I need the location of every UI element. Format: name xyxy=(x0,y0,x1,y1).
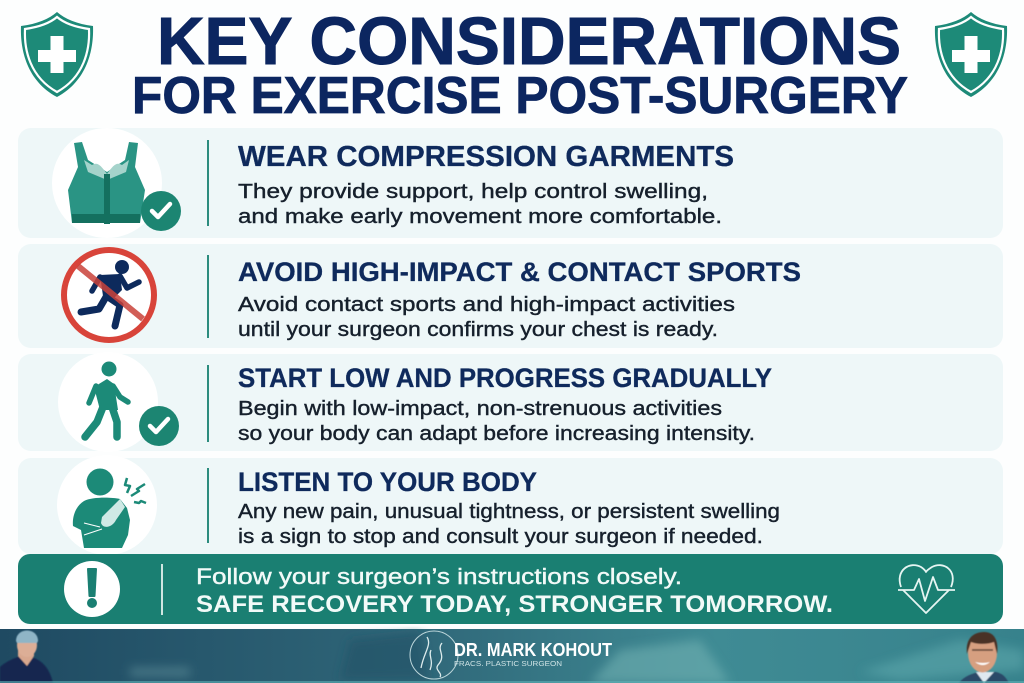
body: garments: and make early movement more comfortable. xyxy=(238,205,722,228)
icon: compression garment xyxy=(52,128,181,238)
surgeon photo left xyxy=(0,630,53,683)
body: sports xyxy=(238,293,735,341)
banner text xyxy=(196,564,833,618)
body: garments: They provide support, help control swelling, xyxy=(238,180,708,203)
icon: walking person xyxy=(58,352,179,452)
title: KEY CONSIDERATIONS xyxy=(157,4,901,79)
icon: heart with pulse xyxy=(898,565,955,613)
surgeon photo right xyxy=(959,632,1009,683)
footer name: DR. MARK KOHOUT xyxy=(454,640,612,660)
callout banner xyxy=(18,554,1003,624)
heading: listen: LISTEN TO YOUR BODY xyxy=(238,467,537,497)
body: progress: so your body can adapt before increasing intensity. xyxy=(238,422,755,445)
logo xyxy=(410,631,458,679)
icon: person with chest pain xyxy=(57,455,157,555)
footer band xyxy=(0,629,1024,683)
body: sports: until your surgeon confirms your chest is ready. xyxy=(238,318,718,341)
icon: no running xyxy=(64,250,154,340)
footer name: FRACS. PLASTIC SURGEON xyxy=(454,659,562,668)
heading: sports: AVOID HIGH-IMPACT & CONTACT SPORTS xyxy=(238,257,801,287)
body: sports: Avoid contact sports and high-impact activities xyxy=(238,293,735,316)
body: listen: Any new pain, unusual tightness, or persistent swelling xyxy=(238,500,780,523)
body: listen: is a sign to stop and consult your surgeon if needed. xyxy=(238,525,763,548)
banner text: Follow your surgeon’s instructions closely. xyxy=(196,564,682,589)
icon: exclamation xyxy=(64,561,120,617)
panel: start low and progress xyxy=(18,352,1003,452)
panel: listen to your body xyxy=(18,455,1003,555)
panel: wear compression garments xyxy=(18,128,1003,238)
body: progress: Begin with low-impact, non-strenuous activities xyxy=(238,397,722,420)
title xyxy=(132,4,908,125)
heading: garments: WEAR COMPRESSION GARMENTS xyxy=(238,141,734,173)
icon: left shield xyxy=(21,12,93,97)
heading: progress: START LOW AND PROGRESS GRADUALLY xyxy=(238,363,772,393)
panel: avoid high-impact sports xyxy=(18,244,1003,348)
footer name xyxy=(454,640,612,668)
title: FOR EXERCISE POST-SURGERY xyxy=(132,67,908,125)
body: progress xyxy=(238,397,755,445)
banner text: SAFE RECOVERY TODAY, STRONGER TOMORROW. xyxy=(196,591,833,618)
body: garments xyxy=(238,180,722,228)
body: listen xyxy=(238,500,780,548)
icon: right shield xyxy=(935,12,1007,97)
